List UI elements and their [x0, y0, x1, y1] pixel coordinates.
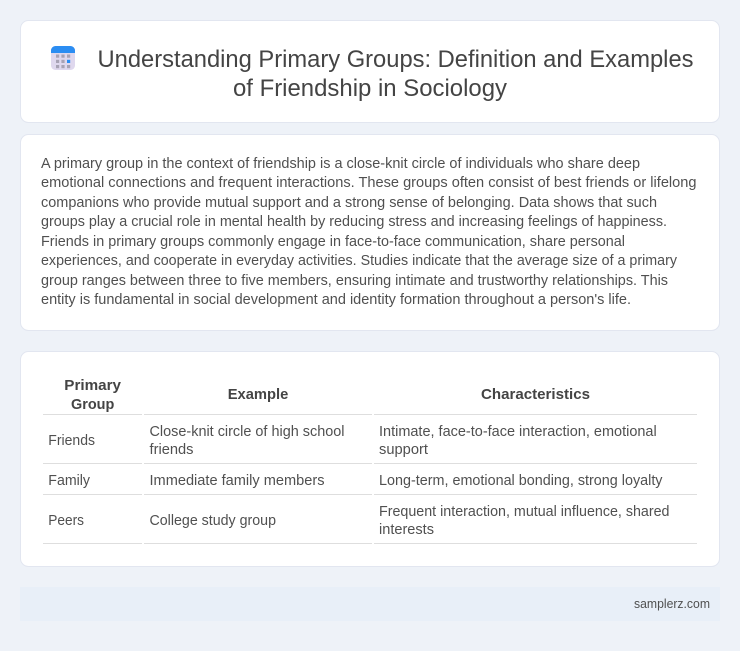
footer source text: samplerz.com: [634, 597, 710, 611]
text block: description paragraph: emotional connections and frequent interactions. These groups often consist of best friends or lifelong: [41, 175, 696, 191]
text block: description paragraph: Friends in primary groups commonly engage in face-to-face communication, share personal: [41, 234, 625, 250]
title: of Friendship in Sociology: [233, 75, 507, 102]
table row: friends: Friends: [48, 433, 95, 449]
panel: table card: [20, 352, 720, 566]
table row: peers: Peers: [48, 513, 84, 529]
table row: friends: Intimate, face-to-face interaction, emotional: [379, 424, 657, 440]
text block: description paragraph: [41, 156, 696, 308]
table row: family: Long-term, emotional bonding, strong loyalty: [379, 473, 663, 489]
panel: description: [20, 134, 720, 330]
title: [98, 46, 694, 102]
table row: friends: friends: [150, 442, 194, 458]
table row: peers: Frequent interaction, mutual influence, shared: [379, 504, 670, 520]
text block: description paragraph: entity is fundamental in social development and identity formation throughout a person's life.: [41, 292, 631, 308]
table header: Primary: [64, 377, 122, 394]
table header: Example: [228, 386, 288, 403]
table row: friends: Close-knit circle of high school: [150, 424, 344, 440]
table header: [64, 377, 590, 413]
text block: description paragraph: groups play a crucial role in mental health by reducing stress and increasing feelings of happiness.: [41, 214, 667, 230]
table header: Group: [71, 396, 114, 413]
footer bar: [20, 587, 720, 621]
panel: title card: [20, 20, 720, 122]
table row: family: [48, 473, 663, 489]
table row: peers: [48, 504, 670, 538]
table row: friends: [48, 424, 657, 458]
title: Understanding Primary Groups: Definition and Examples: [98, 46, 694, 73]
text block: description paragraph: A primary group in the context of friendship is a close-knit circle of individuals who share deep: [41, 156, 640, 172]
table row: family: Immediate family members: [150, 473, 324, 489]
table row: peers: interests: [379, 522, 434, 538]
table header: Characteristics: [481, 386, 590, 403]
icon: calendar: [51, 46, 75, 70]
text block: description paragraph: group ranges between three to five members, ensuring intimate and trustworthy relationships. This: [41, 273, 668, 289]
table row: peers: College study group: [150, 513, 276, 529]
text block: description paragraph: companions who provide mutual support and a strong sense of belonging. Data shows that such: [41, 195, 657, 211]
text block: description paragraph: experiences, and cooperate in everyday activities. Studies indicate that the average size of a primary: [41, 253, 678, 269]
table row: friends: support: [379, 442, 428, 458]
table row: family: Family: [48, 473, 91, 489]
